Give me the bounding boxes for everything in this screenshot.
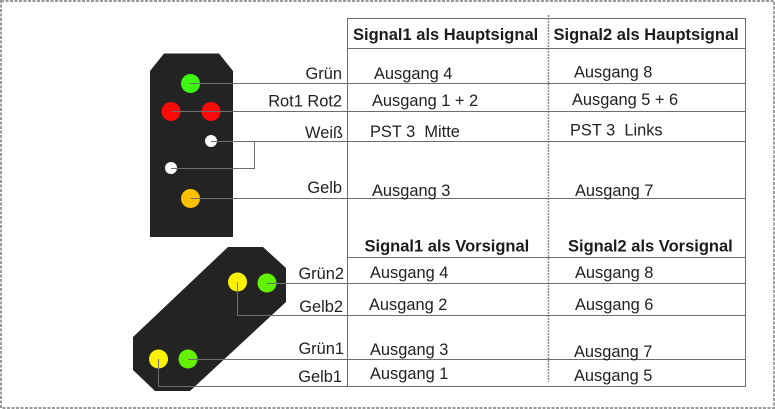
column: Signal2 Hauptsignal outputs [570,64,678,200]
column: Signal1 Hauptsignal outputs: Ausgang 4 [374,65,452,83]
signal 2 housing: Vorsignal [133,247,286,391]
column: Signal1 Hauptsignal outputs: Ausgang 3 [372,182,450,200]
lamp: red 1 [162,102,180,121]
column: Signal1 Vorsignal outputs: Ausgang 2 [369,296,447,314]
row labels: signal 2: Grün1 [298,340,344,358]
lamp: yellow 2 [228,272,247,292]
lamp: green 2 [258,274,276,292]
column: Signal2 Vorsignal outputs: Ausgang 8 [575,264,653,282]
row labels: signal 2: Gelb2 [299,298,343,316]
column: Signal2 Hauptsignal outputs: Ausgang 8 [574,64,652,82]
row labels: signal 2: Gelb1 [298,368,342,386]
row labels: signal 1: Grün [306,65,342,83]
heading: Signal1 als Hauptsignal: Signal1 als Hauptsignal [353,26,538,44]
row labels: signal 1: Gelb [307,179,342,197]
lamp: white upper [205,135,217,147]
heading: Signal2 als Hauptsignal: Signal2 als Hauptsignal [554,26,739,44]
table grid [348,15,746,386]
lamp: white lower [165,162,177,174]
lamp: yellow 1 [149,350,168,368]
column: Signal1 Hauptsignal outputs: PST 3 Mitte [370,123,460,141]
heading: Signal2 als Vorsignal: Signal2 als Vorsignal [568,238,733,256]
lamp: green 1 [178,350,198,368]
column: Signal2 Hauptsignal outputs: Ausgang 5 + 6 [572,91,678,109]
column: Signal1 Hauptsignal outputs [370,65,478,200]
column: Signal2 Vorsignal outputs: Ausgang 7 [574,343,652,361]
column: Signal2 Vorsignal outputs: Ausgang 6 [575,296,653,314]
lamp: red 2 [202,102,220,121]
signal 1 housing: Hauptsignal [150,54,233,237]
column: Signal1 Vorsignal outputs: Ausgang 3 [370,341,448,359]
row labels: signal 1: Weiß [305,124,343,142]
column: Signal1 Vorsignal outputs: Ausgang 4 [370,264,448,282]
heading: Signal1 als Vorsignal: Signal1 als Vorsignal [364,238,529,256]
column: Signal2 Hauptsignal outputs: Ausgang 7 [575,182,653,200]
column: Signal2 Vorsignal outputs [574,264,653,385]
column: Signal1 Vorsignal outputs [369,264,448,383]
row labels: signal 2: Grün2 [298,265,344,283]
leader lines from lamps to table rows [158,84,746,386]
lamp: amber [181,189,200,208]
column: Signal2 Vorsignal outputs: Ausgang 5 [574,367,652,385]
column: Signal1 Vorsignal outputs: Ausgang 1 [370,365,448,383]
row labels: signal 2 [298,265,344,386]
row labels: signal 1: Rot1 Rot2 [268,92,342,110]
column: Signal1 Hauptsignal outputs: Ausgang 1 + 2 [372,92,478,110]
column: Signal2 Hauptsignal outputs: PST 3 Links [570,122,663,140]
lamp: green [181,74,200,93]
row labels: signal 1 [268,65,343,197]
